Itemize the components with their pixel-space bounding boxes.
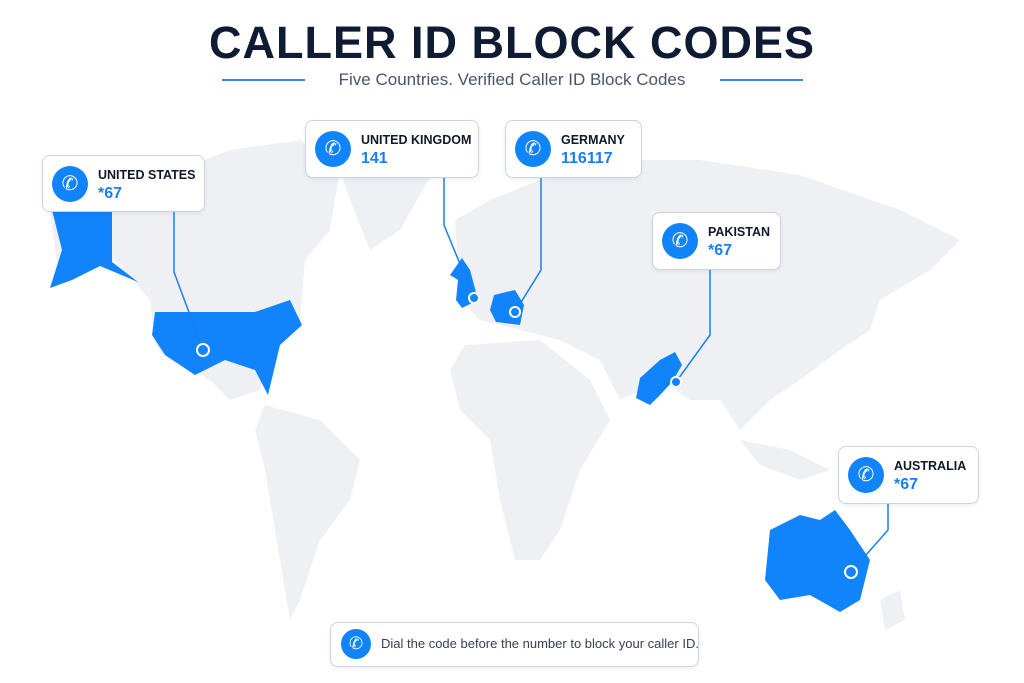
callout: united states: ✆ (62, 173, 78, 195)
callout: united states: *67 (98, 185, 122, 202)
footer note: ✆ (349, 634, 363, 653)
callout: australia: ✆ (858, 464, 874, 486)
callout: united states: UNITED STATES (98, 168, 195, 182)
title: CALLER ID BLOCK CODES (209, 17, 815, 68)
callout: australia: AUSTRALIA (894, 459, 966, 473)
callout: united kingdom: 141 (361, 150, 388, 167)
callout: australia (838, 446, 979, 504)
callout: germany: ✆ (525, 138, 541, 160)
callout: pakistan: ✆ (672, 230, 688, 252)
footer note: Dial the code before the number to block your caller ID. (381, 636, 699, 651)
callout: germany: 116117 (561, 150, 613, 167)
callout: pakistan: *67 (708, 242, 732, 259)
callout: united kingdom: ✆ (325, 138, 341, 160)
callout: pakistan (652, 212, 781, 270)
callout: united kingdom: UNITED KINGDOM (361, 133, 471, 147)
callout: germany (505, 120, 642, 178)
callout: germany: GERMANY (561, 133, 625, 147)
callout: australia: *67 (894, 476, 918, 493)
footer note (330, 622, 699, 667)
subtitle: Five Countries. Verified Caller ID Block Codes (339, 70, 685, 89)
callout: united states (42, 155, 205, 212)
callout: united kingdom (305, 120, 479, 178)
callout: pakistan: PAKISTAN (708, 225, 770, 239)
